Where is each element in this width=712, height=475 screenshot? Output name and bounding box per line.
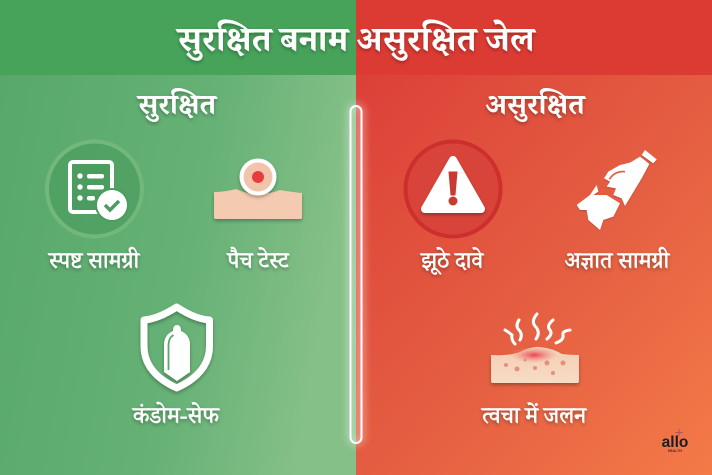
label: unknown ingredients: अज्ञात सामग्री [565,248,670,273]
label: skin burning: त्वचा में जलन [481,402,587,428]
label: patch test: पैच टेस्ट [226,247,290,273]
logo: allo health: allo [662,434,688,451]
icon: patch test [214,158,302,219]
label: false claims: झूठे दावे [420,247,484,275]
icon: broken bottle [577,150,657,230]
icon: clear ingredients [47,142,142,236]
panel: safe background [0,75,356,475]
icon: skin burning [491,314,579,383]
label: condom-safe: कंडोम-सेफ [132,402,220,428]
heading: safe: सुरक्षित [136,88,218,123]
header band: green [0,0,356,75]
logo: allo health: HEALTH [668,449,682,453]
panel: unsafe background [356,75,712,475]
icon: condom-safe shield [144,307,210,388]
label: clear ingredients: स्पष्ट सामग्री [48,248,140,273]
icon: false claims warning [406,142,500,236]
heading: unsafe: असुरक्षित [485,88,587,123]
header band: red [356,0,712,75]
center divider [350,106,362,443]
title: सुरक्षित बनाम असुरक्षित जेल [175,19,537,61]
